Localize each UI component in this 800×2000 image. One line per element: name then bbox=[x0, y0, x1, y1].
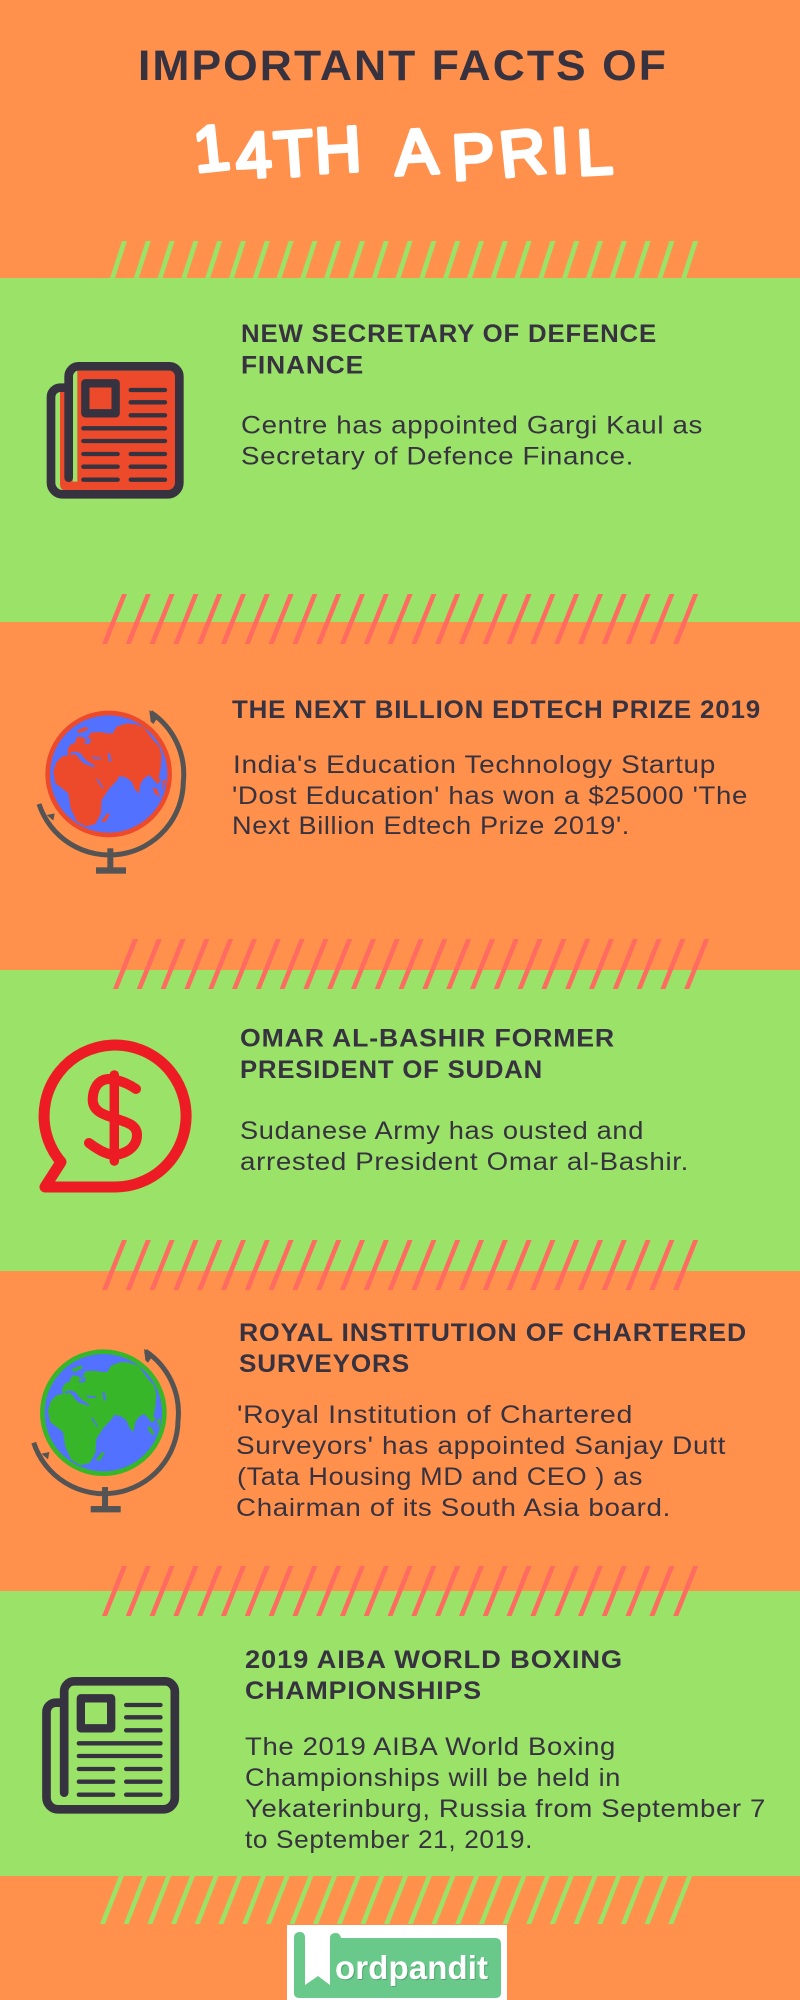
divider: coral hatch 4 bbox=[102, 1566, 698, 1616]
icon: dollar speech bubble bbox=[44, 1045, 186, 1187]
heading: PRESIDENT OF SUDAN bbox=[240, 1056, 543, 1084]
body text: Sudanese Army has ousted and bbox=[240, 1117, 644, 1145]
body text bbox=[241, 412, 703, 470]
body text bbox=[245, 1733, 766, 1854]
body text: (Tata Housing MD and CEO ) as bbox=[237, 1463, 643, 1491]
heading bbox=[241, 320, 657, 380]
heading: NEW SECRETARY OF DEFENCE bbox=[241, 320, 657, 348]
body text: Centre has appointed Gargi Kaul as bbox=[241, 412, 703, 440]
body text: Next Billion Edtech Prize 2019'. bbox=[232, 812, 630, 840]
panel: omar al-bashir bbox=[0, 970, 800, 1271]
panel: footer bbox=[0, 1876, 800, 2000]
panel: next billion edtech prize bbox=[0, 622, 800, 970]
body text: Chairman of its South Asia board. bbox=[236, 1494, 671, 1522]
heading: CHAMPIONSHIPS bbox=[245, 1677, 482, 1705]
body text: arrested President Omar al-Bashir. bbox=[240, 1148, 689, 1176]
heading bbox=[239, 1319, 747, 1378]
heading bbox=[245, 1646, 623, 1705]
heading: 2019 AIBA WORLD BOXING bbox=[245, 1646, 623, 1674]
title line: IMPORTANT FACTS OF bbox=[138, 42, 668, 90]
heading bbox=[240, 1024, 615, 1084]
icon: globe green land bbox=[34, 1349, 178, 1512]
heading: FINANCE bbox=[241, 352, 364, 380]
icon: newspaper outline bbox=[46, 1681, 175, 1809]
body text bbox=[232, 751, 748, 840]
heading: THE NEXT BILLION EDTECH PRIZE 2019 bbox=[232, 696, 761, 724]
body text bbox=[240, 1117, 689, 1176]
body text: to September 21, 2019. bbox=[245, 1826, 533, 1854]
heading: OMAR AL-BASHIR FORMER bbox=[240, 1024, 615, 1052]
body text bbox=[236, 1401, 726, 1522]
body text: Championships will be held in bbox=[245, 1764, 621, 1792]
panel: royal institution of chartered surveyors bbox=[0, 1271, 800, 1591]
heading: SURVEYORS bbox=[239, 1350, 410, 1378]
body text: India's Education Technology Startup bbox=[233, 751, 716, 779]
heading: ROYAL INSTITUTION OF CHARTERED bbox=[239, 1319, 747, 1347]
body text: Secretary of Defence Finance. bbox=[241, 442, 634, 470]
body text: 'Royal Institution of Chartered bbox=[237, 1401, 633, 1429]
divider: green hatch under header bbox=[102, 241, 706, 278]
panel: header bbox=[0, 0, 800, 278]
divider: coral hatch 3 bbox=[102, 1240, 698, 1290]
panel: new secretary of defence finance bbox=[0, 278, 800, 622]
body text: Surveyors' has appointed Sanjay Dutt bbox=[236, 1432, 726, 1460]
panel: aiba world boxing championships bbox=[0, 1591, 800, 1876]
icon: newspaper red bbox=[51, 366, 179, 494]
date title: 14TH APRIL bbox=[190, 111, 614, 194]
divider: coral hatch 1 bbox=[102, 594, 698, 644]
logo: wordpandit: ordpandit bbox=[335, 1949, 488, 1986]
body text: The 2019 AIBA World Boxing bbox=[245, 1733, 616, 1761]
logo: wordpandit bbox=[287, 1925, 507, 2000]
body text: 'Dost Education' has won a $25000 'The bbox=[232, 782, 748, 810]
icon: globe red land bbox=[39, 710, 184, 874]
body text: Yekaterinburg, Russia from September 7 bbox=[245, 1795, 766, 1823]
divider: green hatch above footer bbox=[99, 1876, 693, 1924]
divider: coral hatch 2 bbox=[113, 939, 709, 989]
